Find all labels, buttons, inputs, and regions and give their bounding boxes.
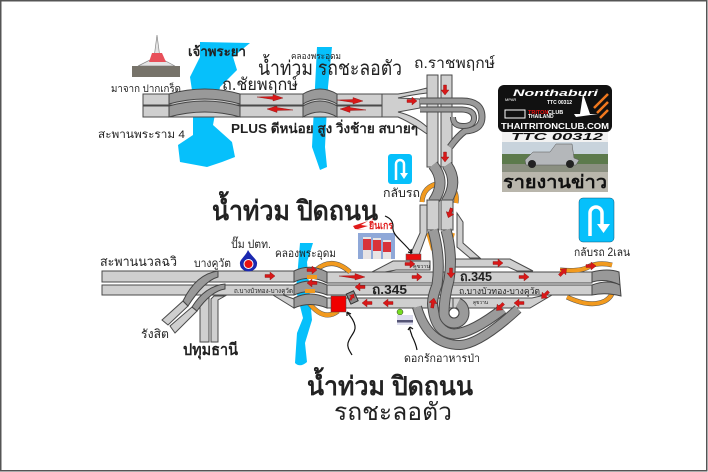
callout arrow to lower closure — [347, 312, 355, 355]
heading: flood road closed upper: น้ำท่วม ปิดถนน — [212, 190, 378, 226]
bridge over Chao Phraya — [169, 89, 240, 117]
green location dot — [397, 309, 403, 315]
club logo badge: THAILAND — [528, 114, 554, 120]
label: Bang Bua Thong road right: ถ.บางบัวทอง-บางคูวัต — [459, 286, 540, 297]
label: Chaiyaphruek road: ถ.ชัยพฤกษ์ — [222, 75, 298, 94]
traffic direction arrows — [257, 85, 596, 313]
label: PTT pump: ปั๊ม ปตท. — [231, 236, 271, 251]
label: route 345 centre: ถ.345 — [372, 282, 407, 297]
small U-turn sign — [388, 154, 412, 184]
heading: flood road closed lower: น้ำท่วม ปิดถนน — [307, 366, 473, 401]
label: Pathum Thani: ปทุมธานี — [183, 340, 238, 360]
Rangsit and Pathum Thani ramps — [162, 271, 225, 342]
label: Bang Bua Thong road left: ถ.บางบัวทอง-บางคูวัต — [234, 287, 293, 295]
PTT pump icon — [240, 250, 257, 272]
club logo badge: TTC 00312 — [547, 100, 572, 106]
north cloverleaf interchange — [420, 101, 482, 147]
club logo badge: TRITON — [528, 110, 548, 116]
label: Khu Khwan lower: คูขวาน — [473, 300, 489, 306]
label: flood, slow traffic: น้ำท่วม รถชะลอตัว — [258, 54, 402, 80]
river: Chao Phraya — [178, 42, 250, 167]
canal: lower Khlong Phra Udom — [295, 243, 313, 365]
club logo badge: Nonthaburi — [513, 88, 599, 98]
top road: Chaiyaphruek — [143, 88, 427, 134]
company logo: ยิ่นเกร — [369, 218, 394, 232]
restaurant sign — [397, 315, 413, 325]
label: Rangsit: รังสิต — [141, 327, 169, 341]
club logo badge: MPAR — [505, 97, 516, 102]
news photo panel — [502, 132, 608, 192]
company logo — [353, 218, 394, 232]
club logo badge — [498, 85, 612, 132]
label: route 345 east: ถ.345 — [460, 269, 492, 284]
orange loop around north U-turn — [422, 183, 456, 250]
club logo badge: CLUB — [548, 110, 563, 116]
red silos photo — [358, 233, 395, 259]
lower canal bridges — [294, 263, 350, 315]
label: 2-lane U-turn: กลับรถ 2เลน — [574, 247, 630, 259]
news photo panel: รายงานข่าว — [503, 172, 607, 192]
red closure marker: upper road — [406, 254, 421, 260]
callout arrow to restaurant — [408, 327, 417, 350]
label: Dok Rak restaurant: ดอกรักอาหารป่า — [404, 353, 480, 365]
label: lower canal: คลองพระอุดม — [275, 248, 336, 260]
east bridges and U-turn loops — [560, 264, 621, 304]
club logo badge: THAITRITONCLUB.COM — [501, 122, 609, 131]
label: Khu Khwan upper: คูขวาน — [413, 264, 431, 270]
lower main road — [102, 259, 592, 308]
bridge over canal — [303, 89, 337, 117]
large U-turn sign — [579, 198, 614, 242]
label: upper canal: คลองพระอุดม — [291, 51, 341, 62]
red closure marker: lower road — [331, 296, 346, 312]
news photo panel: TTC 00312 — [511, 132, 604, 143]
southern interchange loops — [417, 230, 518, 345]
small sign with arrow — [346, 291, 358, 304]
label: Chao Phraya: เจ้าพระยา — [188, 44, 246, 59]
label: Rama 4 bridge: สะพานพระราม 4 — [98, 129, 185, 141]
label: Nuan Chawi bridge: สะพานนวลฉวิ — [100, 254, 177, 269]
vertical road: Ratchaphruek — [410, 75, 480, 258]
label: from Pak Kret: มาจาก ปากเกร็ด — [111, 81, 181, 95]
monument icon — [132, 35, 180, 77]
heading: slow traffic lower: รถชะลอตัว — [334, 399, 452, 426]
label: Bang Khu Wat: บางคูวัต — [194, 258, 231, 270]
label: PLUS note: PLUS ดีหน่อย สูง วิ่งช้าย สบายๆ — [231, 119, 418, 137]
label: small U-turn: กลับรถ — [383, 186, 420, 200]
canal: upper Khlong Phra Udom — [312, 47, 332, 170]
label: Ratchaphruek road: ถ.ราชพฤกษ์ — [414, 55, 495, 72]
callout arrow to upper closure — [385, 216, 412, 253]
